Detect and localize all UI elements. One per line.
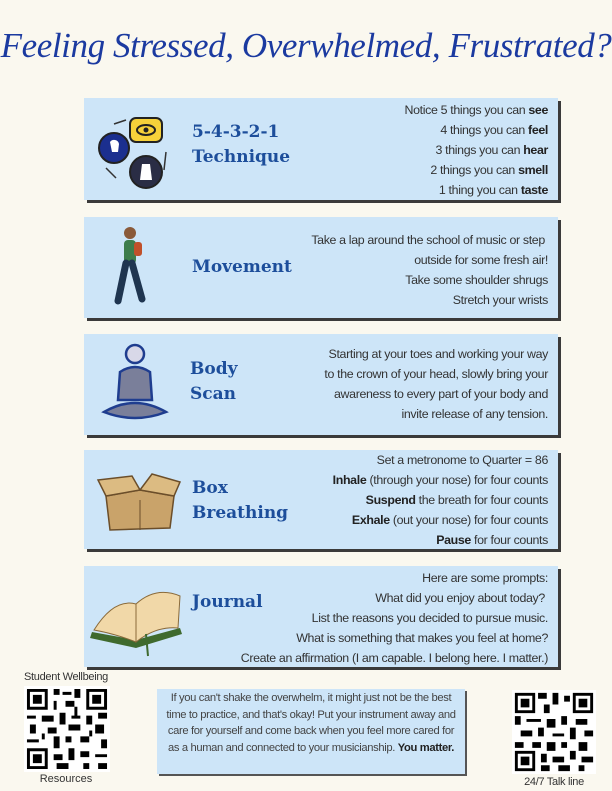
text block — [324, 347, 548, 421]
text block: Set a metronome to Quarter = 86 — [377, 453, 548, 467]
heading: Scan — [190, 384, 236, 404]
text block: 1 thing you can taste — [439, 183, 548, 197]
icon: open box — [96, 473, 181, 531]
panel: journal — [84, 566, 558, 667]
text block: 3 things you can hear — [435, 143, 548, 157]
text block: Here are some prompts: — [422, 571, 548, 585]
heading: Journal — [192, 592, 263, 612]
text block: What did you enjoy about today? — [375, 591, 545, 605]
heading — [192, 478, 288, 523]
text block: List the reasons you decided to pursue music. — [312, 611, 548, 625]
text block — [333, 453, 548, 547]
text block — [405, 103, 548, 197]
heading — [192, 122, 290, 167]
text block: What is something that makes you feel at home? — [296, 631, 548, 645]
callout: closing message — [157, 689, 465, 774]
text block: Stretch your wrists — [453, 293, 548, 307]
icon: speech bubbles — [98, 117, 167, 189]
panel: movement — [84, 217, 558, 318]
callout: closing message: If you can't shake the overwhelm, it might just not be the best time to practice, and that's okay! Put your instrument away and care for yourself and come back when you feel more cared for as a human and connected to your musicianship. You matter. — [166, 692, 456, 754]
panel: box breathing — [84, 450, 558, 549]
text block: Exhale (out your nose) for four counts — [352, 513, 548, 527]
text block: Suspend the breath for four counts — [366, 493, 548, 507]
text block: Take some shoulder shrugs — [405, 273, 548, 287]
text block: Starting at your toes and working your way — [329, 347, 548, 361]
heading: Movement — [192, 257, 292, 277]
text block: Pause for four counts — [436, 533, 548, 547]
label: resources: Resources — [40, 773, 92, 785]
text block: Create an affirmation (I am capable. I belong here. I matter.) — [241, 651, 548, 665]
text block: Notice 5 things you can see — [405, 103, 548, 117]
heading: Technique — [192, 147, 290, 167]
text block: 2 things you can smell — [430, 163, 548, 177]
heading: Body — [190, 359, 237, 379]
heading — [190, 359, 238, 404]
heading: 5-4-3-2-1 — [192, 122, 279, 142]
label: talk line: 24/7 Talk line — [524, 776, 584, 788]
icon: meditating figure — [101, 344, 169, 420]
heading: Breathing — [192, 503, 288, 523]
text block: outside for some fresh air! — [414, 253, 548, 267]
icon: walking person — [114, 227, 146, 304]
text block: to the crown of your head, slowly bring your — [324, 367, 548, 381]
text block: awareness to every part of your body and — [334, 387, 548, 401]
heading: Box — [192, 478, 228, 498]
panel: body scan — [84, 334, 558, 435]
title: Feeling Stressed, Overwhelmed, Frustrated? — [1, 26, 611, 65]
text block: Inhale (through your nose) for four counts — [333, 473, 548, 487]
icon: open book — [90, 592, 182, 656]
text block — [311, 233, 548, 307]
label: student wellbeing: Student Wellbeing — [24, 671, 108, 683]
QR code: left — [24, 686, 110, 772]
text block — [241, 571, 548, 665]
text block: 4 things you can feel — [440, 123, 548, 137]
QR code: right — [512, 690, 596, 774]
text block: invite release of any tension. — [401, 407, 548, 421]
text block: Take a lap around the school of music or step — [311, 233, 545, 247]
panel: 5-4-3-2-1 — [84, 98, 558, 200]
